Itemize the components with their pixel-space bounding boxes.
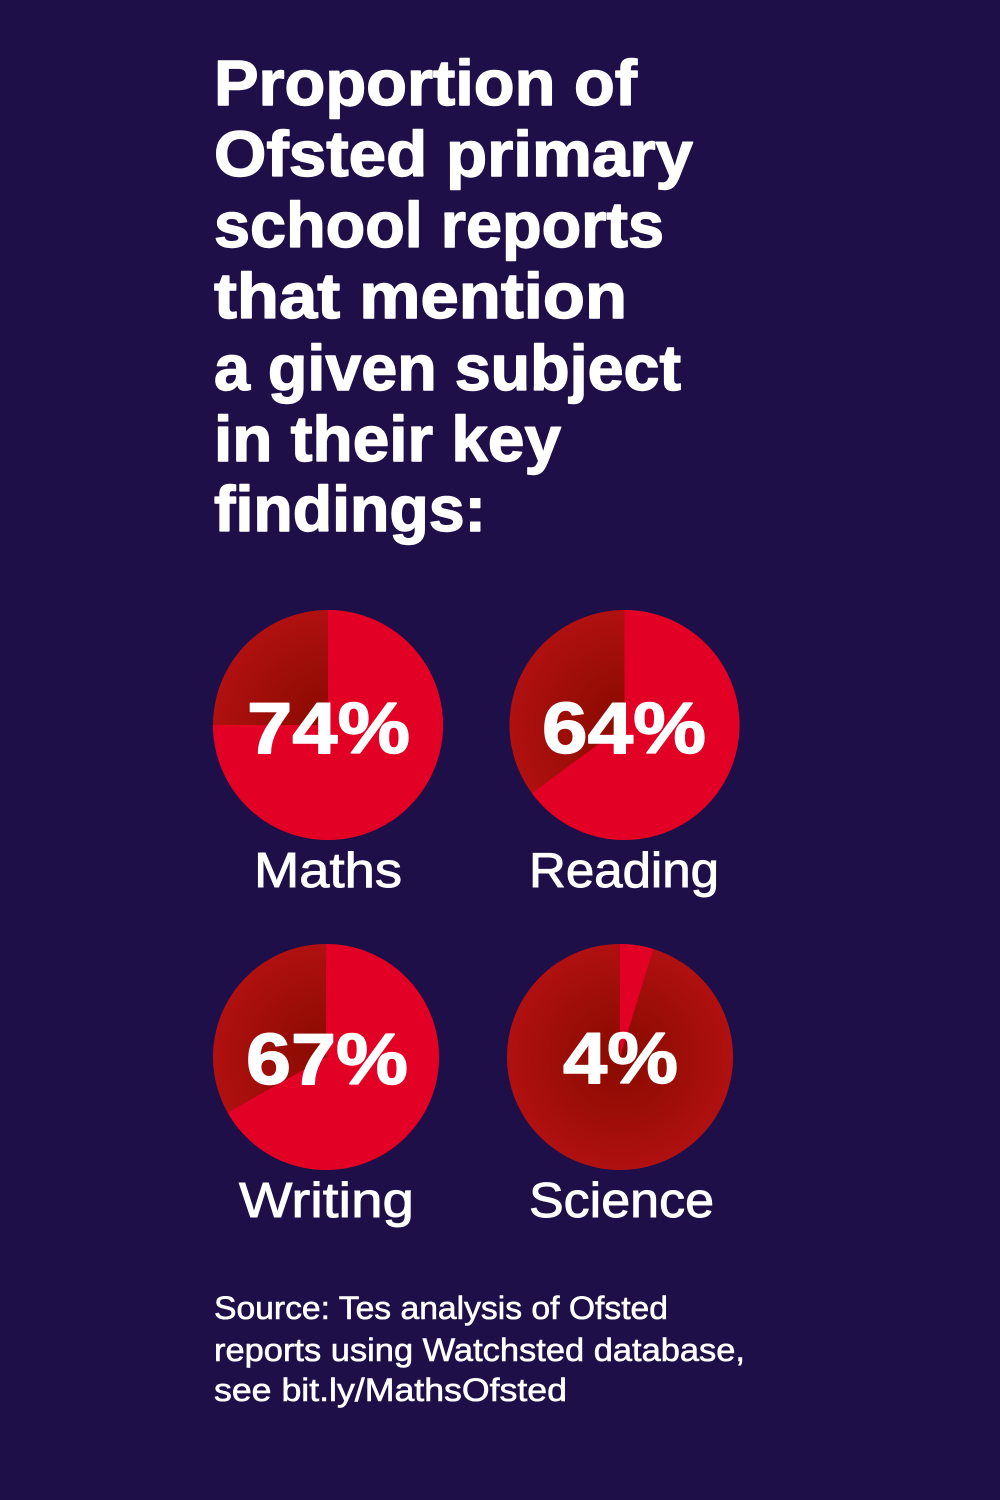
title: school reports xyxy=(214,189,664,261)
pie chart: reading 64% xyxy=(510,610,740,840)
value: 64%: 64% xyxy=(542,689,706,769)
label: Science: Science xyxy=(529,1174,714,1228)
source note: see bit.ly/MathsOfsted xyxy=(214,1372,567,1408)
source note xyxy=(214,1290,745,1408)
label: Reading: Reading xyxy=(529,844,719,898)
panel: science xyxy=(507,944,733,1228)
title: a given subject xyxy=(214,332,681,404)
source note: reports using Watchsted database, xyxy=(214,1332,745,1368)
title: in their key xyxy=(214,403,561,475)
title: Proportion of xyxy=(214,47,638,119)
title xyxy=(214,47,693,545)
title: findings: xyxy=(214,473,486,545)
label: Writing: Writing xyxy=(239,1174,414,1228)
title: that mention xyxy=(214,260,627,332)
panel: writing xyxy=(213,944,439,1228)
pie chart: writing 67% xyxy=(213,944,439,1170)
value: 74%: 74% xyxy=(247,689,410,769)
source note: Source: Tes analysis of Ofsted xyxy=(214,1290,668,1326)
pie chart: science 4% xyxy=(507,944,733,1170)
value: 67%: 67% xyxy=(246,1020,408,1100)
pie chart: maths 74% xyxy=(213,610,443,840)
title: Ofsted primary xyxy=(214,118,693,190)
panel: reading xyxy=(510,610,740,898)
label: Maths: Maths xyxy=(254,844,402,898)
value: 4%: 4% xyxy=(563,1019,678,1099)
panel: maths xyxy=(213,610,443,898)
